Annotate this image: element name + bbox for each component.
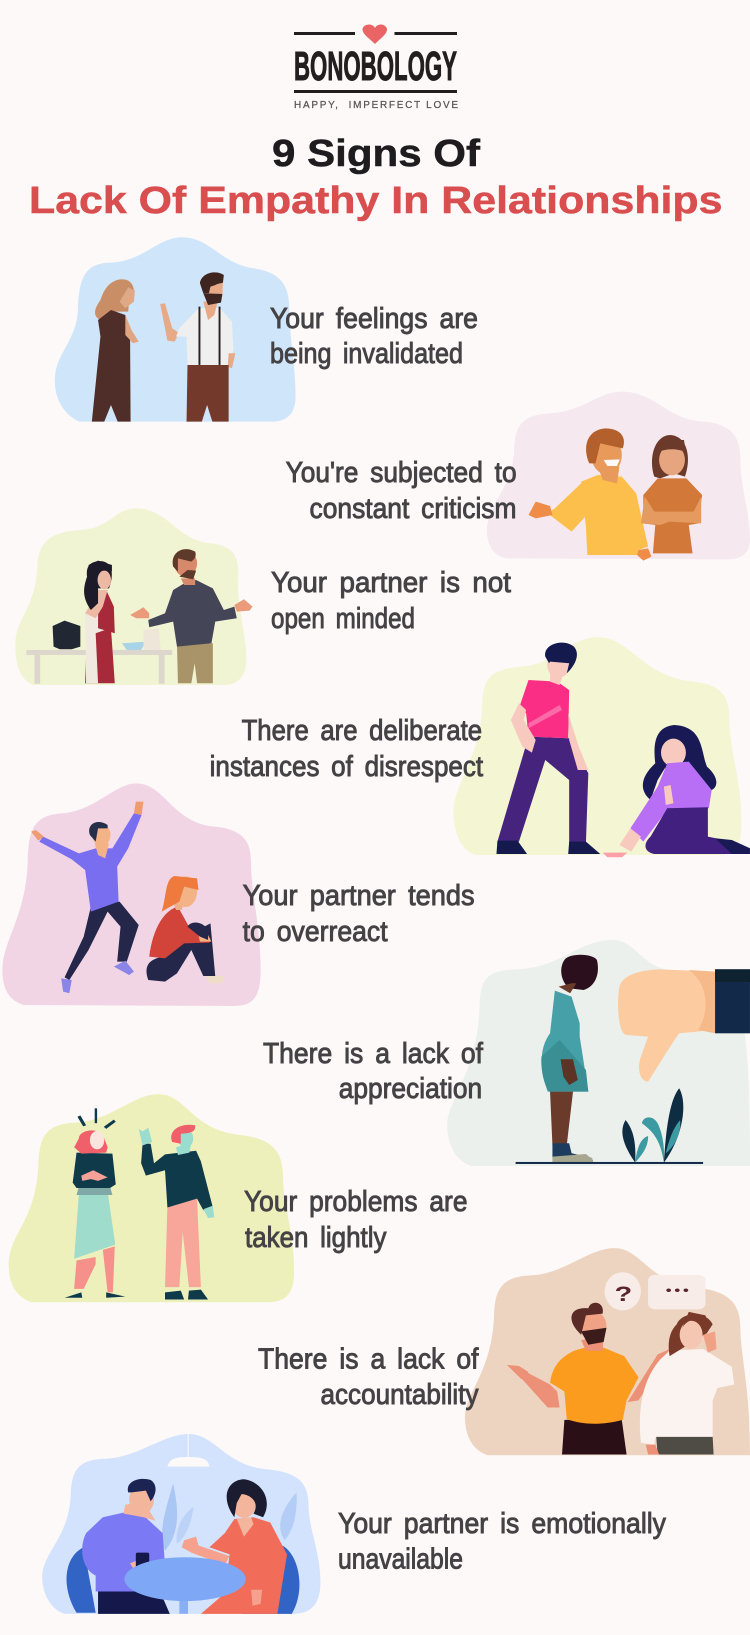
icon: heart — [362, 24, 387, 44]
text: sign 1: Your feelings are — [270, 303, 478, 335]
text: sign 3: Your partner is not — [271, 567, 511, 599]
text: sign 3: open minded — [271, 603, 415, 635]
text: sign 8: There is a lack of — [258, 1344, 479, 1376]
text: sign 5: Your partner tends — [243, 880, 475, 912]
panel: disrespect — [210, 637, 750, 857]
text: sign 4: instances of disrespect — [210, 751, 483, 783]
text: sign 7: taken lightly — [245, 1222, 387, 1254]
panel: problems taken lightly — [9, 1094, 467, 1302]
panel: lack of accountability — [258, 1248, 750, 1455]
panel: constant criticism — [286, 392, 750, 561]
text: sign 4 — [210, 715, 483, 783]
text: sign 7 — [244, 1186, 468, 1254]
text: sign 7: Your problems are — [244, 1186, 468, 1218]
panel: emotionally unavailable — [42, 1434, 666, 1614]
title — [29, 133, 722, 222]
text: sign 2: constant criticism — [310, 493, 516, 525]
illustration: arguing couple — [55, 237, 296, 422]
text: sign 3 — [271, 567, 511, 635]
logo — [294, 24, 458, 111]
text: sign 9: Your partner is emotionally — [338, 1508, 666, 1540]
panel: not open minded — [15, 508, 511, 685]
panel: feelings invalidated — [55, 237, 478, 422]
text: sign 8: accountability — [320, 1379, 479, 1411]
illustration: upset woman and dismissive man — [9, 1094, 294, 1302]
illustration: couple at a table — [42, 1434, 320, 1614]
text: sign 9: unavailable — [338, 1544, 463, 1576]
illustration: confused couple with speech bubbles: ? — [615, 1283, 632, 1306]
text: sign 2: You're subjected to — [286, 457, 517, 489]
title: 9 Signs Of — [272, 133, 480, 175]
text: sign 8 — [258, 1344, 479, 1411]
illustration: man arguing with woman cooking — [15, 508, 253, 685]
panel: overreact — [2, 783, 475, 1006]
text: sign 9 — [338, 1508, 666, 1576]
text: sign 6: appreciation — [339, 1073, 482, 1105]
text: sign 1 — [270, 303, 478, 370]
illustration: confused couple with speech bubbles — [465, 1248, 750, 1455]
text: sign 5: to overreact — [243, 916, 388, 948]
logo: BONOBOLOGY — [294, 43, 457, 89]
illustration: critical man and woman — [487, 392, 750, 561]
text: sign 4: There are deliberate — [242, 715, 482, 747]
text: sign 5 — [243, 880, 475, 948]
logo: HAPPY, IMPERFECT LOVE — [294, 100, 458, 111]
illustration: man jumping beside seated woman — [2, 783, 261, 1006]
illustration: man walking past kneeling woman — [453, 637, 750, 857]
text: sign 6: There is a lack of — [263, 1038, 484, 1070]
text: sign 6 — [263, 1038, 484, 1105]
illustration: woman and thumbs down — [447, 940, 750, 1166]
text: sign 1: being invalidated — [270, 338, 463, 370]
title: Lack Of Empathy In Relationships — [29, 180, 722, 222]
text: sign 2 — [286, 457, 517, 525]
panel: lack of appreciation — [263, 940, 750, 1166]
